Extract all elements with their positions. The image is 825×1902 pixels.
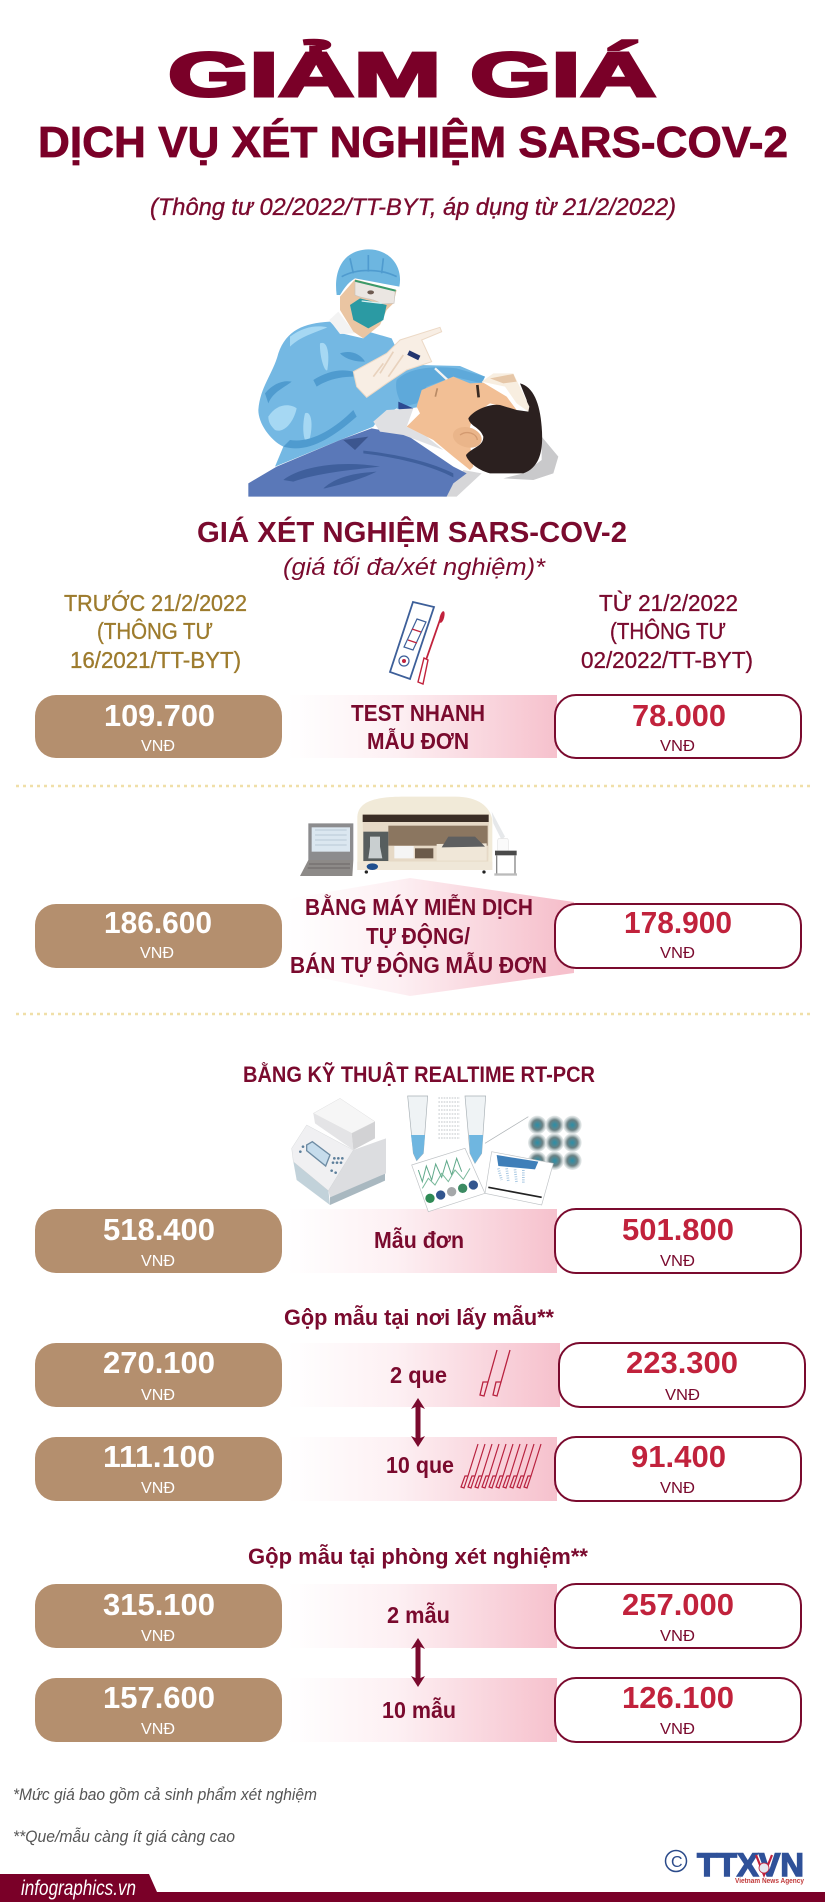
column header: after: [581, 590, 753, 673]
row: rapid test: VNĐ: [660, 738, 695, 755]
row: 10 samples: [35, 1678, 801, 1742]
arrow: 2 to 10 samples: [411, 1638, 425, 1687]
row: 2 samples: 2 mẫu: [387, 1601, 450, 1628]
row: 2 swabs: 2 que: [390, 1362, 447, 1388]
row: 2 samples: VNĐ: [660, 1628, 695, 1645]
illustration: nurse swabbing patient: [248, 249, 558, 497]
column header: before: TRƯỚC 21/2/2022: [64, 590, 247, 616]
row: rapid test: VNĐ: [141, 738, 175, 755]
title: DỊCH VỤ XÉT NGHIỆM SARS-COV-2: [38, 117, 788, 167]
column header: after: TỪ 21/2/2022: [599, 590, 738, 616]
row: 10 samples: VNĐ: [141, 1721, 175, 1738]
row: rapid test: 78.000: [632, 698, 726, 733]
row: rapid test: 109.700: [104, 698, 215, 733]
row: RT-PCR single sample: Mẫu đơn: [374, 1226, 464, 1253]
column header: before: (THÔNG TƯ: [97, 617, 213, 644]
row: 2 swabs: VNĐ: [141, 1387, 175, 1404]
row: 10 samples: 157.600: [103, 1680, 215, 1715]
row: 10 samples: 126.100: [622, 1680, 734, 1715]
footnotes: **Que/mẫu càng ít giá càng cao: [13, 1827, 235, 1846]
row: RT-PCR single sample: [35, 1209, 801, 1273]
column header: after: 02/2022/TT-BYT): [581, 647, 753, 673]
footer band: [0, 1874, 825, 1902]
row: immunoassay: BẰNG MÁY MIỄN DỊCH: [305, 892, 533, 920]
row: 10 swabs: VNĐ: [141, 1480, 175, 1497]
row: 2 swabs: 223.300: [626, 1345, 738, 1380]
row: rapid test: TEST NHANH: [351, 700, 485, 726]
row: 10 swabs: 111.100: [103, 1439, 215, 1474]
icon: immunoassay analyzer and laptop: [300, 797, 517, 876]
column header: before: 16/2021/TT-BYT): [70, 647, 241, 673]
row: 10 samples: 10 mẫu: [382, 1696, 456, 1723]
logo: TTXVN: TTXVN: [697, 1847, 804, 1883]
row: RT-PCR single sample: VNĐ: [660, 1253, 695, 1270]
row: immunoassay: 178.900: [624, 905, 732, 940]
heading: pooled at collection site: Gộp mẫu tại nơi lấy mẫu**: [284, 1305, 554, 1330]
row: immunoassay: [35, 878, 801, 996]
row: 2 samples: VNĐ: [141, 1628, 175, 1645]
arrow: 2 to 10 swabs: [411, 1398, 425, 1447]
row: 10 samples: VNĐ: [660, 1721, 695, 1738]
subtitle: (Thông tư 02/2022/TT-BYT, áp dụng từ 21/2/2022): [150, 194, 676, 221]
row: RT-PCR single sample: VNĐ: [141, 1253, 175, 1270]
row: RT-PCR single sample: 501.800: [622, 1212, 734, 1247]
subheading: (giá tối đa/xét nghiệm)*: [283, 554, 546, 581]
row: 2 swabs: VNĐ: [665, 1387, 700, 1404]
row: 2 samples: [35, 1584, 801, 1648]
title: GIẢM GIÁ: [168, 41, 656, 110]
icon: 2 swabs: [480, 1350, 510, 1396]
row: 2 samples: 315.100: [103, 1587, 215, 1622]
column header: before: [64, 590, 247, 673]
row: 10 swabs: 10 que: [386, 1452, 454, 1478]
row: rapid test: MẪU ĐƠN: [367, 726, 469, 754]
column header: after: (THÔNG TƯ: [610, 617, 726, 644]
row: 2 samples: 257.000: [622, 1587, 734, 1622]
icon: 10 swabs: [461, 1444, 541, 1488]
row: immunoassay: VNĐ: [140, 945, 174, 962]
title: [38, 41, 788, 167]
row: 2 swabs: 270.100: [103, 1345, 215, 1380]
icon: rapid test cassette and swab: [390, 602, 446, 684]
row: 10 swabs: 91.400: [631, 1439, 726, 1474]
heading: test prices: GIÁ XÉT NGHIỆM SARS-COV-2: [197, 515, 627, 549]
row: immunoassay: TỰ ĐỘNG/: [366, 922, 471, 949]
row: 2 swabs: [35, 1343, 805, 1407]
icon: thermal cycler, tubes, charts: [292, 1096, 582, 1212]
row: 10 swabs: [35, 1437, 801, 1501]
row: 10 swabs: VNĐ: [660, 1480, 695, 1497]
row: immunoassay: BÁN TỰ ĐỘNG MẪU ĐƠN: [290, 950, 547, 978]
footnotes: *Mức giá bao gồm cả sinh phẩm xét nghiệm: [13, 1785, 317, 1804]
row: rapid test: [35, 695, 801, 758]
footnotes: [13, 1785, 317, 1846]
row: immunoassay: 186.600: [104, 905, 212, 940]
footer band: infographics.vn: [21, 1877, 136, 1900]
heading: pooled at lab: Gộp mẫu tại phòng xét nghiệm**: [248, 1544, 588, 1569]
logo: TTXVN: Vietnam News Agency: [735, 1876, 805, 1885]
logo: TTXVN: C: [671, 1854, 683, 1871]
row: RT-PCR single sample: 518.400: [103, 1212, 215, 1247]
row: immunoassay: VNĐ: [660, 945, 695, 962]
heading: RT-PCR: BẰNG KỸ THUẬT REALTIME RT-PCR: [243, 1062, 595, 1087]
